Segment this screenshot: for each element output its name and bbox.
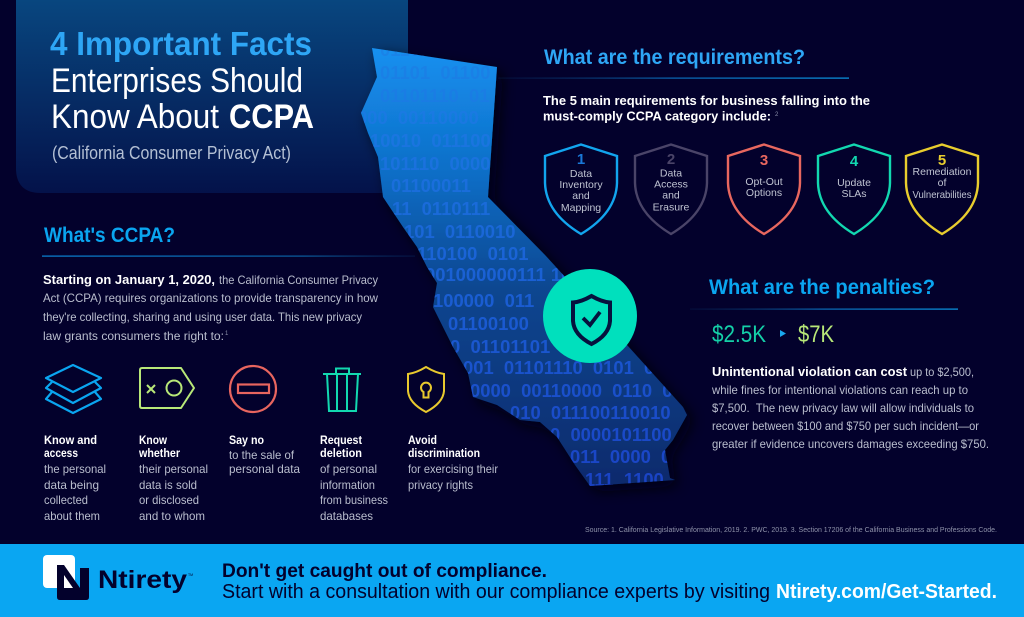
shield 3: opt-out: Opt-Out: [745, 176, 783, 188]
shield 3: opt-out: Options: [746, 187, 782, 199]
shield 4: update SLAs: 4: [850, 153, 859, 170]
text block: requirements intro: must-comply CCPA category include:: [543, 108, 771, 124]
California map with binary pattern: 0 0000101100: [550, 424, 672, 445]
shield 5: remediation: of: [938, 177, 946, 189]
text: request deletion: of personal: [320, 462, 377, 476]
shield 4: update SLAs: SLAs: [841, 188, 867, 200]
California map with binary pattern: 01101: [380, 39, 430, 60]
text: know and access: about them: [44, 509, 100, 523]
text block: penalties: recover between $100 and $750 per such incident—or: [712, 419, 979, 433]
right: say no: [229, 366, 300, 476]
text block: penalties: Unintentional violation can cost: [712, 364, 908, 379]
title: (California Consumer Privacy Act): [52, 143, 291, 163]
text: avoid discrimination: Avoid: [408, 433, 437, 447]
title: Know About: [51, 98, 220, 136]
right: request deletion: [320, 368, 388, 523]
text: say no: to the sale of: [229, 448, 295, 462]
text: request deletion: Request: [320, 433, 362, 447]
California map with binary pattern: 101110 0000: [380, 153, 490, 174]
text: avoid discrimination: for exercising their: [408, 462, 498, 476]
shield 1: data inventory: Data: [570, 168, 592, 180]
text: request deletion: databases: [320, 509, 373, 523]
shield 2: data access: 2: [667, 151, 675, 168]
text: know and access: access: [44, 446, 78, 460]
text block: penalties: up to $2,500,: [910, 365, 974, 379]
call to action: Ntirety.com/Get-Started.: [776, 581, 997, 603]
California map with binary pattern: 000 00110000: [357, 107, 479, 128]
title: CCPA: [229, 98, 314, 136]
California map with binary pattern: [357, 39, 687, 490]
shield 2: data access: Data: [660, 168, 682, 180]
text: know and access: the personal: [44, 462, 106, 476]
text block: requirements intro: 2: [775, 112, 779, 118]
shield 2: data access: [635, 144, 707, 234]
California map with binary pattern: 01101110 01: [380, 85, 489, 106]
text: know and access: [44, 433, 106, 523]
shield 1: data inventory: Mapping: [561, 202, 601, 214]
California map with binary pattern: 011 0000 0: [570, 446, 671, 467]
source note: Source: 1. California Legislative Information, 2019. 2. PWC, 2019. 3. Section 17206 of the California Business and Professions Code.: [585, 527, 997, 534]
penalty figures: [712, 321, 834, 348]
text block: penalties: while fines for intentional violations can reach up to: [711, 383, 968, 397]
icon: shield with keyhole: [408, 367, 444, 412]
call to action: [222, 561, 997, 603]
logo: TM: [188, 573, 193, 577]
right: avoid discrimination: [408, 367, 498, 492]
California map with binary pattern: 010 011100110010: [510, 402, 671, 423]
California map with binary pattern: 001 01101110 0101 0: [463, 357, 654, 378]
text block: CCPA intro: the California Consumer Privacy: [219, 273, 378, 287]
text: know and access: Know and: [44, 433, 97, 447]
text: know whether: and to whom: [139, 509, 205, 523]
California map with binary pattern: 01101 01100: [380, 62, 490, 83]
text block: CCPA intro: Starting on January 1, 2020,: [43, 272, 215, 287]
California map with binary pattern: 100000 011: [433, 290, 534, 311]
penalty figures: $2.5K: [712, 321, 766, 348]
text: know whether: their personal: [139, 462, 208, 476]
shield 4: update SLAs: [818, 144, 890, 234]
text: avoid discrimination: privacy rights: [408, 478, 473, 492]
text: know and access: data being: [44, 478, 99, 492]
shield 2: data access: Access: [654, 178, 688, 190]
shield 1: data inventory: and: [572, 190, 590, 202]
title: [50, 25, 314, 163]
text block: penalties: $7,500. The new privacy law will allow individuals to: [712, 401, 974, 415]
text: request deletion: deletion: [320, 446, 362, 460]
shield 1: data inventory: [545, 144, 617, 234]
title panel: [16, 0, 408, 193]
penalty figures: $7K: [798, 321, 834, 348]
shield 5: remediation: [906, 144, 978, 234]
text block: CCPA intro: Act (CCPA) requires organizations to provide transparency in how: [43, 291, 378, 305]
heading: requirements: What are the requirements?: [544, 46, 805, 69]
icon: layers: [46, 365, 101, 413]
icon: central shield badge: [543, 269, 637, 363]
icon: trash can: [323, 368, 361, 411]
text: avoid discrimination: [408, 433, 498, 492]
text block: requirements intro: [543, 93, 870, 124]
shield 5: remediation: 5: [938, 152, 946, 169]
text block: CCPA intro: 1: [225, 331, 229, 337]
call to action: Start with a consultation with our compliance experts by visiting: [222, 581, 770, 603]
footer banner: [0, 544, 1024, 617]
text: avoid discrimination: discrimination: [408, 446, 480, 460]
California map with binary pattern: 111 1100: [585, 469, 664, 490]
text: know whether: data is sold: [139, 478, 197, 492]
text block: CCPA intro: law grants consumers the right to:: [43, 329, 224, 343]
icon: tag: [140, 368, 194, 408]
title: Enterprises Should: [51, 62, 303, 100]
icon: no entry: [230, 366, 276, 412]
logo: Ntirety: [98, 566, 187, 594]
heading: penalties: What are the penalties?: [709, 276, 935, 299]
right: know whether: [138, 368, 208, 523]
California map with binary pattern: 01100100: [448, 313, 529, 334]
California map with binary pattern: 11 0110111: [392, 198, 490, 219]
heading: What's CCPA: What's CCPA?: [44, 224, 175, 247]
text: know whether: Know: [139, 433, 168, 447]
shield 4: update SLAs: Update: [837, 177, 871, 189]
text: request deletion: information: [320, 478, 375, 492]
text block: CCPA intro: [43, 272, 378, 343]
California map with binary pattern: 0 01101101: [450, 336, 550, 357]
shield 1: data inventory: Inventory: [559, 179, 603, 191]
shield 3: opt-out: 3: [760, 152, 768, 169]
shield 5: remediation: Vulnerabilities: [912, 189, 972, 201]
California map with binary pattern: 001000000111 10: [425, 264, 571, 285]
logo: [43, 555, 193, 600]
shield 1: data inventory: 1: [577, 151, 585, 168]
text block: CCPA intro: they're collecting, sharing and using user data. This new privacy: [43, 310, 362, 324]
text block: requirements intro: The 5 main requirements for business falling into the: [543, 93, 870, 108]
text: know whether: [138, 433, 208, 523]
shield 2: data access: Erasure: [653, 202, 690, 214]
California map with binary pattern: 110100 0101: [417, 243, 528, 264]
arrow: [780, 330, 786, 337]
text: know whether: or disclosed: [139, 493, 199, 507]
California map with binary pattern: 10010 011100: [370, 130, 491, 151]
text: request deletion: from business: [320, 493, 388, 507]
text: say no: [229, 433, 300, 476]
text block: penalties: greater if evidence uncovers damages exceeding $750.: [712, 437, 989, 451]
right: know and access: [44, 365, 106, 523]
California map with binary pattern: 01100011: [391, 175, 471, 196]
California map with binary pattern: 101 0110010: [404, 221, 515, 242]
text: know and access: collected: [44, 493, 88, 507]
shield 5: remediation: Remediation: [913, 166, 972, 178]
California map with binary pattern: 0000 00110000 0110 0: [470, 380, 673, 401]
text block: penalties: [711, 364, 989, 451]
text: know whether: whether: [138, 446, 180, 460]
shield 3: opt-out: [728, 144, 800, 234]
text: say no: Say no: [229, 433, 264, 447]
shield 2: data access: and: [662, 190, 680, 202]
text: request deletion: [320, 433, 388, 523]
call to action: Don't get caught out of compliance.: [222, 561, 547, 582]
text: say no: personal data: [229, 462, 300, 476]
title: 4 Important Facts: [50, 25, 312, 62]
